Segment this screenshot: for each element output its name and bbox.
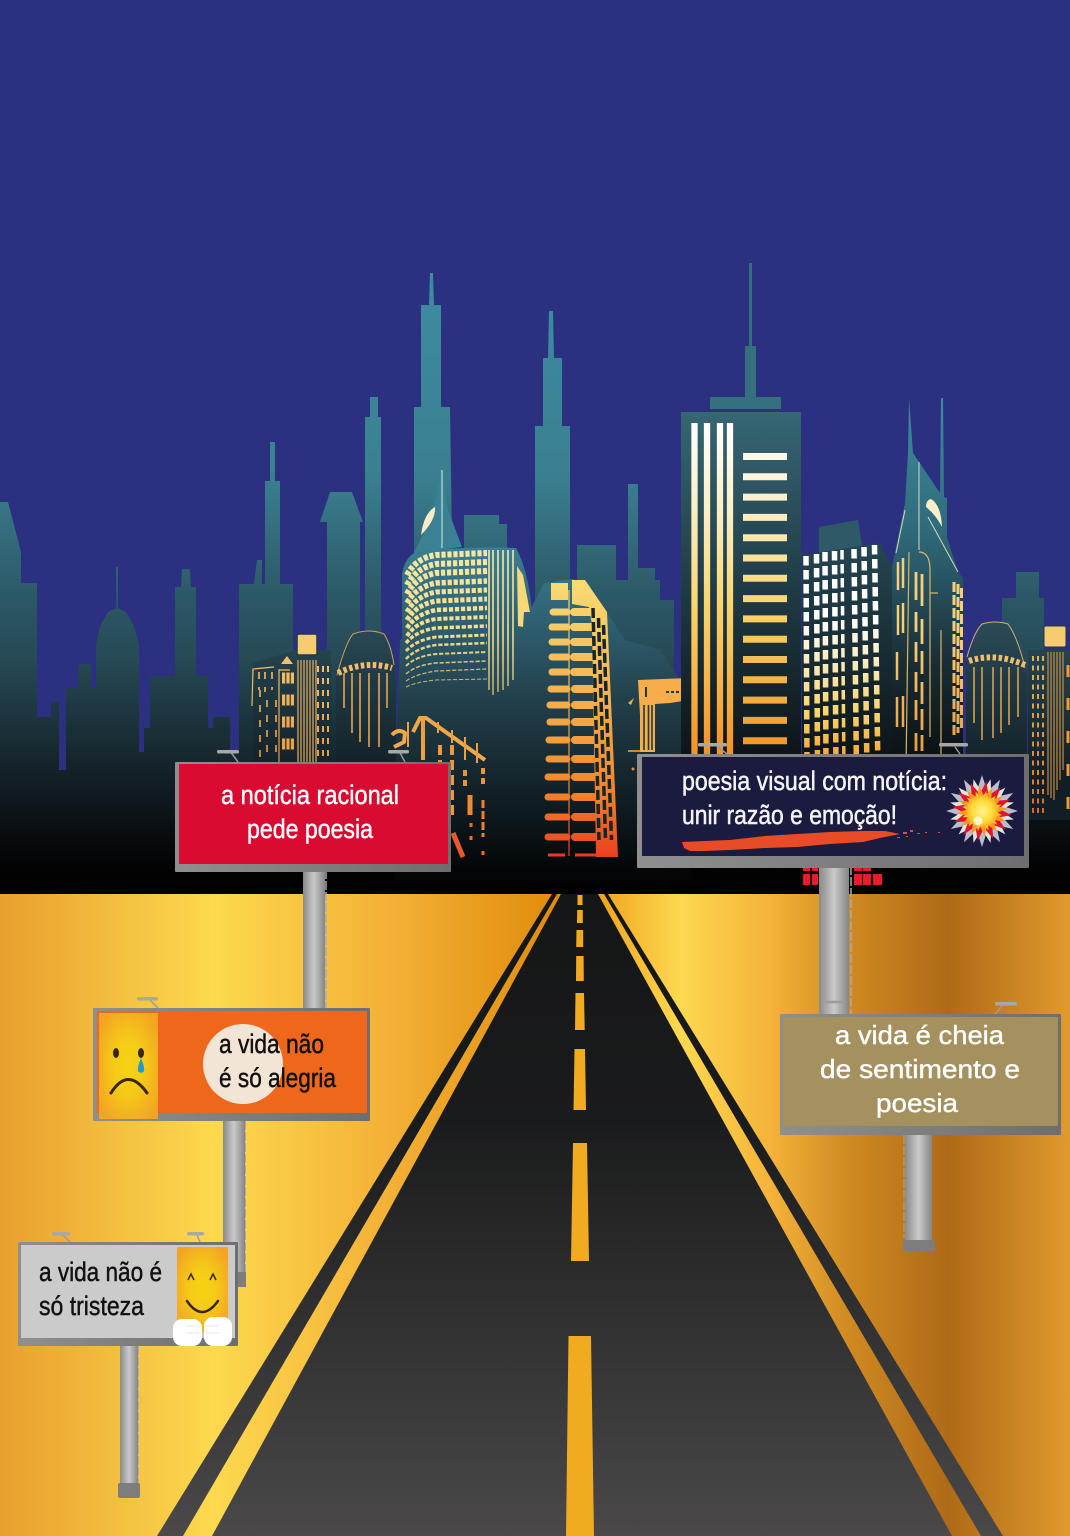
ground right (580, 894, 1070, 1536)
text: vida cheia: poesia (876, 1088, 959, 1118)
text: vida tristeza (39, 1257, 162, 1321)
billboard: red (175, 750, 451, 872)
circle highlight (203, 1024, 283, 1104)
happy face with hands (173, 1247, 232, 1346)
billboard: orange (93, 997, 370, 1121)
night sky background (0, 0, 1070, 894)
road (157, 894, 1003, 1536)
text: poesia visual: unir razão e emoção! (682, 800, 897, 830)
text: vida alegria: é só alegria (219, 1063, 337, 1093)
sad face (99, 1013, 158, 1119)
spired tower right (892, 398, 963, 770)
left dome building (336, 631, 396, 770)
window grid building (802, 520, 895, 772)
billboard: dark (637, 743, 1029, 868)
text: vida alegria (219, 1029, 337, 1093)
far skyline silhouette left (0, 273, 1070, 894)
pole: dark sign (819, 866, 851, 1018)
brush underline (682, 830, 940, 851)
text: vida tristeza: só tristeza (39, 1291, 145, 1321)
text: vida cheia: de sentimento e (820, 1054, 1020, 1084)
text: noticia racional (221, 780, 399, 844)
road centre dashes (566, 895, 594, 1536)
text: noticia racional: pede poesia (247, 814, 374, 844)
mid mound behind towers (395, 560, 690, 880)
red windows behind billboard (803, 868, 882, 885)
orange tower (548, 580, 618, 857)
text: noticia racional: a notícia racional (221, 780, 399, 810)
round building with spire (402, 470, 532, 700)
icon: explosion (942, 771, 1022, 851)
right edge building (1028, 626, 1070, 820)
text: vida alegria: a vida não (219, 1029, 324, 1059)
text: poesia visual (682, 766, 947, 830)
pole: orange sign (223, 1119, 246, 1287)
billboard: grey (18, 1232, 238, 1346)
pole: tan sign (903, 1135, 935, 1251)
pole: red sign (303, 870, 326, 1012)
main tall tower with stripes (681, 263, 801, 772)
pole: grey sign (118, 1344, 140, 1498)
text: vida cheia: a vida é cheia (835, 1020, 1005, 1050)
text: vida tristeza: a vida não é (39, 1257, 162, 1287)
billboard: tan (780, 1002, 1061, 1135)
right dome building (966, 622, 1027, 775)
text: vida cheia (820, 1020, 1020, 1118)
text: poesia visual: poesia visual com notícia: (682, 766, 947, 796)
small orange building (628, 678, 695, 770)
left low building cluster (252, 634, 331, 770)
orange lattice building (392, 717, 485, 857)
ground left (0, 894, 580, 1536)
